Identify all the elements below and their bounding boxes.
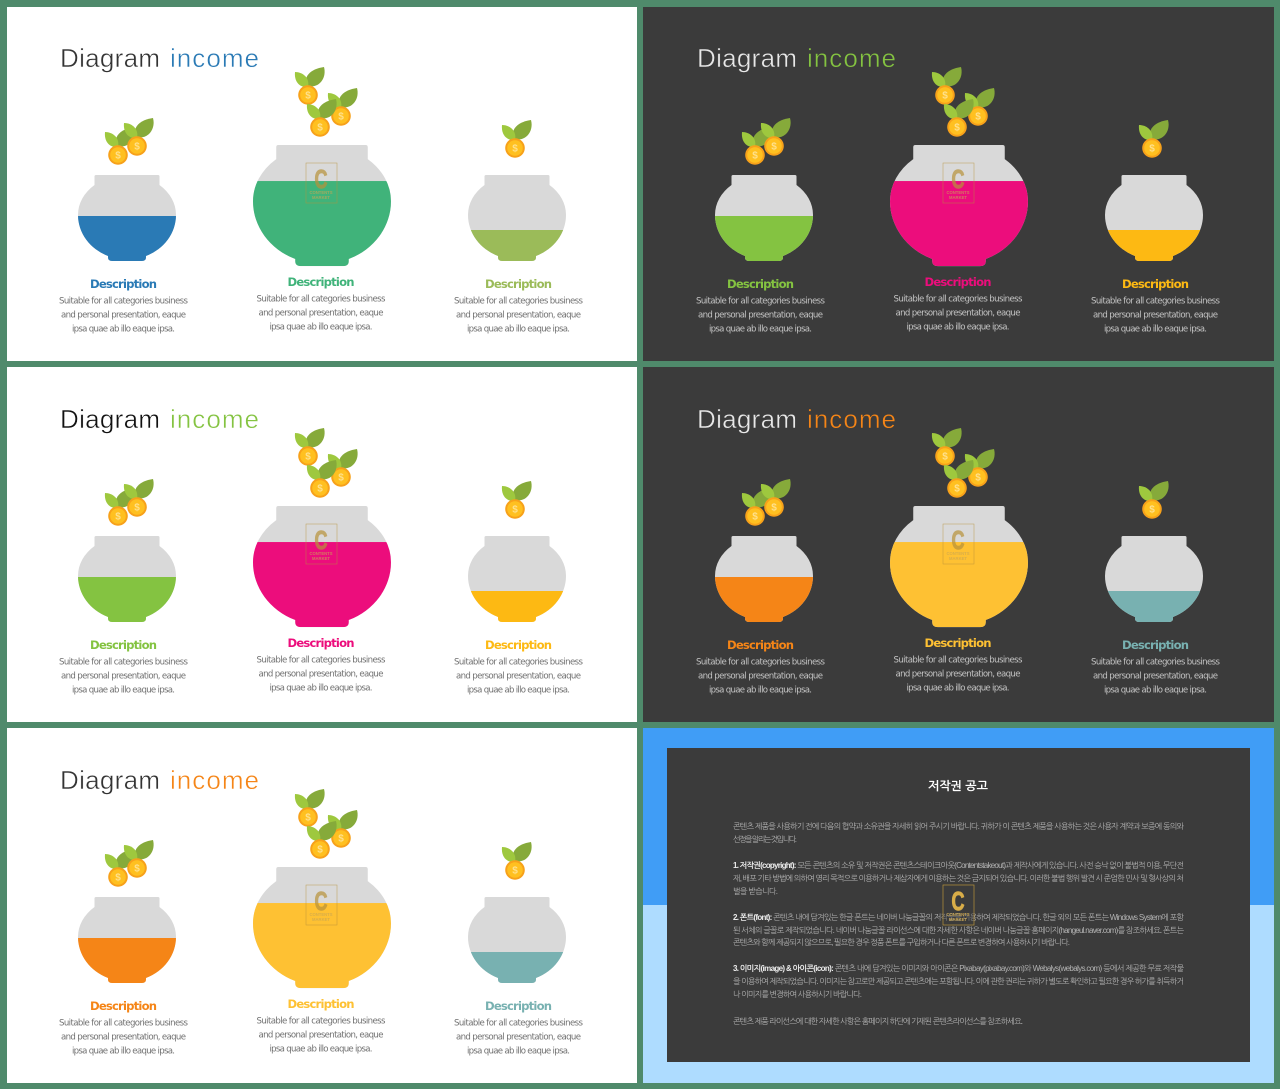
text: left description bbox=[59, 638, 189, 696]
text: left description: Suitable for all categories business bbox=[696, 658, 826, 668]
clause 1: 1. 저작권(copyright): 모든 콘텐츠의 소유 및 저작권은 콘텐츠스테이크아웃(Contentstakeout)과 제작사에게 있습니다. 사전 승낙 없이 불법적 이용, 무단전 bbox=[733, 861, 1184, 870]
text: centre description bbox=[894, 275, 1023, 332]
pot left bbox=[78, 175, 176, 261]
text: right description bbox=[454, 277, 584, 334]
icon: coins centre: $ bbox=[975, 112, 981, 122]
notice heading: 저작권 공고 bbox=[928, 779, 989, 793]
pot centre bbox=[253, 867, 391, 988]
pot left bbox=[78, 897, 176, 983]
watermark logo bbox=[306, 524, 337, 564]
text: left description: ipsa quae ab illo eaque ipsa. bbox=[72, 324, 175, 334]
title: income bbox=[170, 43, 259, 73]
text: right description: and personal presentation, eaque bbox=[456, 1032, 581, 1042]
closing line: 콘텐츠 제품 라이선스에 대한 자세한 사항은 홈페이지 하단에 기재된 콘텐츠라이선스를 참조하세요. bbox=[733, 1017, 1023, 1026]
pot right bbox=[468, 536, 566, 622]
icon: coins centre bbox=[932, 67, 995, 137]
clause 3: 3. 이미지(image) & 아이콘(icon): 콘텐츠 내에 담겨있는 이미지와 아이콘은 Pixabay(pixabay.com)와 Webalys(webalys.com) 등에서 제공한 무료 저작물 bbox=[733, 964, 1184, 973]
watermark logo: MARKET bbox=[949, 556, 967, 561]
pot right bbox=[1105, 536, 1203, 622]
watermark logo: CONTENTS bbox=[309, 912, 333, 917]
text: right description: Description bbox=[485, 277, 552, 291]
text: left description: Description bbox=[90, 277, 157, 291]
panel: green white slide bbox=[7, 367, 637, 722]
text: right description: ipsa quae ab illo eaque ipsa. bbox=[467, 686, 570, 696]
icon: coins left: $ bbox=[115, 512, 121, 522]
title: Diagram bbox=[60, 765, 160, 795]
icon: coins left: $ bbox=[115, 872, 121, 884]
text: right description: ipsa quae ab illo eaque ipsa. bbox=[467, 1046, 570, 1056]
text: left description: ipsa quae ab illo eaque ipsa. bbox=[72, 1046, 175, 1056]
icon: coins centre: $ bbox=[305, 812, 311, 824]
title: income bbox=[170, 765, 259, 795]
text: centre description bbox=[256, 275, 386, 332]
icon: coins left: $ bbox=[134, 864, 140, 874]
text: centre description: Description bbox=[288, 636, 354, 650]
icon: coins left bbox=[105, 840, 154, 887]
icon: coin right bbox=[502, 842, 532, 880]
watermark logo: CONTENTS bbox=[946, 190, 970, 195]
icon: coins centre: $ bbox=[954, 122, 960, 134]
text: right description bbox=[454, 999, 584, 1056]
panel: copyright notice bbox=[643, 728, 1274, 1083]
text: right description: Description bbox=[485, 999, 552, 1013]
icon: coins centre: $ bbox=[338, 112, 344, 122]
pot centre bbox=[253, 506, 391, 627]
text: centre description: and personal presentation, eaque bbox=[896, 308, 1020, 318]
clause 2: 콘텐츠와 함께 제공되지 않으므로, 필요한 경우 정품 폰트를 구입하거나 다른 폰트로 변경하여 사용하시기 바랍니다. bbox=[733, 938, 1070, 947]
icon: coin right: $ bbox=[512, 144, 518, 154]
icon: coins centre bbox=[932, 428, 995, 498]
text: left description: ipsa quae ab illo eaque ipsa. bbox=[709, 686, 812, 696]
clause 2 bbox=[733, 913, 1184, 947]
text: right description: and personal presentation, eaque bbox=[1093, 310, 1218, 320]
watermark logo bbox=[306, 885, 337, 925]
text: right description: Suitable for all categories business bbox=[454, 658, 584, 668]
watermark logo: C bbox=[314, 525, 328, 555]
intro paragraph bbox=[733, 822, 1184, 844]
text: centre description: and personal presentation, eaque bbox=[258, 1030, 384, 1040]
text: right description: Suitable for all categories business bbox=[1091, 658, 1221, 668]
text: right description: Description bbox=[485, 638, 552, 652]
text: right description: and personal presentation, eaque bbox=[456, 672, 581, 682]
text: left description: Description bbox=[90, 999, 157, 1013]
watermark logo: MARKET bbox=[312, 917, 330, 922]
title: Diagram bbox=[697, 43, 797, 73]
watermark logo: C bbox=[314, 164, 328, 194]
text: centre description: and personal presentation, eaque bbox=[258, 308, 384, 318]
clause 2: 2. 폰트(font): 콘텐츠 내에 담겨있는 한글 폰트는 네이버 나눔글꼴의 저작물을 이용하여 제작되었습니다. 한글 외의 모든 폰트는 Windows System에 포함 bbox=[733, 913, 1184, 922]
icon: coin right: $ bbox=[512, 504, 518, 516]
watermark logo: MARKET bbox=[949, 195, 967, 200]
text: left description: ipsa quae ab illo eaque ipsa. bbox=[72, 686, 175, 696]
watermark logo: CONTENTS bbox=[946, 551, 970, 556]
pot left bbox=[78, 536, 176, 622]
pot centre bbox=[890, 145, 1028, 266]
icon: coins left bbox=[742, 479, 791, 526]
text: left description: ipsa quae ab illo eaque ipsa. bbox=[709, 324, 812, 334]
watermark logo: MARKET bbox=[949, 917, 967, 922]
panel: green dark slide bbox=[643, 7, 1274, 361]
clause 3: 을 이용하여 제작되었습니다. 이미지는 참고로만 제공되고 콘텐츠에는 포함됩니다. 이에 관한 권리는 귀하가 별도로 확인하고 필요한 경우 허가를 취득하거 bbox=[733, 977, 1184, 986]
clause 1 bbox=[733, 861, 1184, 896]
pot right bbox=[468, 897, 566, 983]
icon: coin right bbox=[1139, 481, 1169, 519]
text: right description: Description bbox=[1122, 638, 1189, 652]
text: centre description: Suitable for all categories business bbox=[256, 656, 386, 666]
watermark logo: MARKET bbox=[312, 195, 330, 200]
text: centre description: and personal presentation, eaque bbox=[258, 670, 384, 680]
icon: coins centre: $ bbox=[317, 844, 323, 856]
text: left description: Suitable for all categories business bbox=[59, 658, 189, 668]
text: centre description bbox=[894, 636, 1023, 694]
text: left description: and personal presentation, eaque bbox=[61, 1032, 186, 1042]
text: left description bbox=[59, 277, 189, 334]
icon: coins centre bbox=[295, 67, 358, 137]
icon: coin right bbox=[502, 120, 532, 158]
clause 2: 된 서체의 글꼴로 제작되었습니다. 네이버 나눔글꼴 라이선스에 대한 자세한 사항은 네이버 나눔글꼴 홈페이지(hangeul.naver.com)를 참조하세요. 폰트는 bbox=[733, 926, 1184, 935]
icon: coin right: $ bbox=[512, 866, 518, 876]
title: income bbox=[807, 404, 896, 434]
watermark logo bbox=[943, 163, 974, 203]
text: right description bbox=[454, 638, 584, 696]
text: centre description: ipsa quae ab illo eaque ipsa. bbox=[906, 322, 1010, 332]
clause 1: 재, 배포 기타 방법에 의하여 영리 목적으로 이용하거나 제삼자에게 이용하는 것은 금지되어 있습니다. 이러한 불법 행위 발견 시 준엄한 민사 및 형사상의 처 bbox=[733, 874, 1184, 883]
icon: coins centre: $ bbox=[338, 834, 344, 844]
clause 3 bbox=[733, 964, 1184, 999]
pot right bbox=[468, 175, 566, 261]
intro paragraph: 콘텐츠 제품을 사용하기 전에 다음의 협약과 소유권을 자세히 읽어 주시기 바랍니다. 귀하가 이 콘텐츠 제품을 사용하는 것은 사용자 계약과 보증에 동의와 bbox=[733, 822, 1184, 831]
text: left description: Description bbox=[727, 277, 794, 291]
text: centre description: ipsa quae ab illo eaque ipsa. bbox=[270, 684, 372, 694]
icon: coins left bbox=[742, 118, 791, 165]
text: left description: and personal presentation, eaque bbox=[698, 310, 823, 320]
text: centre description: Description bbox=[924, 636, 992, 650]
text: centre description: Description bbox=[288, 275, 354, 289]
pot right bbox=[1105, 175, 1203, 261]
icon: coins centre: $ bbox=[954, 484, 960, 494]
text: left description: and personal presentation, eaque bbox=[698, 672, 823, 682]
clause 3: 나 이미지를 변경하여 사용하시기 바랍니다. bbox=[733, 990, 862, 999]
icon: coins left: $ bbox=[752, 512, 758, 522]
text: left description bbox=[696, 638, 826, 696]
text: right description: ipsa quae ab illo eaque ipsa. bbox=[467, 324, 570, 334]
text: centre description: Suitable for all categories business bbox=[256, 1016, 386, 1026]
title: Diagram bbox=[60, 404, 160, 434]
title: income bbox=[170, 404, 259, 434]
watermark logo: C bbox=[314, 886, 328, 916]
icon: coins left: $ bbox=[771, 142, 777, 152]
text: centre description: and personal presentation, eaque bbox=[896, 670, 1020, 680]
text: right description: and personal presentation, eaque bbox=[456, 310, 581, 320]
text: left description: and personal presentation, eaque bbox=[61, 672, 186, 682]
icon: coin right: $ bbox=[1149, 504, 1155, 516]
icon: coins centre: $ bbox=[317, 122, 323, 134]
text: left description: Suitable for all categories business bbox=[59, 1018, 189, 1028]
icon: coins centre: $ bbox=[305, 90, 311, 102]
text: centre description: Description bbox=[288, 997, 354, 1011]
text: centre description: ipsa quae ab illo eaque ipsa. bbox=[270, 322, 372, 332]
icon: coin right: $ bbox=[1149, 144, 1155, 154]
text: right description bbox=[1091, 638, 1221, 696]
text: centre description: Suitable for all categories business bbox=[256, 294, 386, 304]
watermark logo: C bbox=[952, 525, 965, 555]
text: left description bbox=[696, 277, 826, 334]
watermark logo: CONTENTS bbox=[946, 912, 970, 917]
text: centre description: ipsa quae ab illo eaque ipsa. bbox=[906, 684, 1010, 694]
icon: coins left: $ bbox=[771, 502, 777, 514]
text: left description: Description bbox=[727, 638, 794, 652]
title: income bbox=[807, 43, 896, 73]
pot left bbox=[715, 536, 813, 622]
icon: coins left: $ bbox=[752, 150, 758, 162]
icon: coins left bbox=[105, 118, 154, 165]
text: left description bbox=[59, 999, 189, 1056]
text: centre description: Description bbox=[924, 275, 992, 289]
icon: coins centre bbox=[295, 789, 358, 859]
icon: coins centre: $ bbox=[338, 472, 344, 484]
pot centre bbox=[890, 506, 1028, 627]
watermark logo: C bbox=[952, 886, 965, 916]
text: right description: Suitable for all categories business bbox=[1091, 296, 1221, 306]
text: right description: ipsa quae ab illo eaque ipsa. bbox=[1104, 686, 1207, 696]
text: left description: Suitable for all categories business bbox=[59, 296, 189, 306]
icon: coins centre: $ bbox=[317, 484, 323, 494]
watermark logo bbox=[943, 885, 974, 925]
icon: coins left bbox=[105, 479, 154, 526]
panel: orange white slide bbox=[7, 728, 637, 1083]
icon: coins centre: $ bbox=[975, 472, 981, 484]
text: centre description: ipsa quae ab illo eaque ipsa. bbox=[270, 1044, 372, 1054]
text: right description: Suitable for all categories business bbox=[454, 1018, 584, 1028]
title: Diagram bbox=[697, 404, 797, 434]
clause 1: 벌을 받습니다. bbox=[733, 887, 778, 896]
icon: coins left: $ bbox=[134, 502, 140, 514]
watermark logo: CONTENTS bbox=[309, 190, 333, 195]
intro paragraph: 선정을 알리는 것입니다. bbox=[733, 835, 797, 844]
text: left description: and personal presentation, eaque bbox=[61, 310, 186, 320]
icon: coins left: $ bbox=[115, 150, 121, 162]
text: right description: and personal presentation, eaque bbox=[1093, 672, 1218, 682]
icon: coins centre bbox=[295, 428, 358, 498]
watermark logo: C bbox=[952, 164, 965, 194]
text: right description: Suitable for all categories business bbox=[454, 296, 584, 306]
icon: coins centre: $ bbox=[942, 452, 948, 462]
watermark logo bbox=[943, 524, 974, 564]
pot centre bbox=[253, 145, 391, 266]
watermark logo: CONTENTS bbox=[309, 551, 333, 556]
icon: coins centre: $ bbox=[305, 452, 311, 462]
text: centre description bbox=[256, 997, 386, 1054]
text: right description bbox=[1091, 277, 1221, 334]
pot left bbox=[715, 175, 813, 261]
text: left description: Description bbox=[90, 638, 157, 652]
text: centre description bbox=[256, 636, 386, 694]
text: right description: ipsa quae ab illo eaque ipsa. bbox=[1104, 324, 1207, 334]
text: centre description: Suitable for all categories business bbox=[894, 294, 1023, 304]
icon: coin right bbox=[502, 481, 532, 519]
watermark logo: MARKET bbox=[312, 556, 330, 561]
text: centre description: Suitable for all categories business bbox=[894, 656, 1023, 666]
text: left description: Suitable for all categories business bbox=[696, 296, 826, 306]
icon: coin right bbox=[1139, 120, 1169, 158]
title: Diagram bbox=[60, 43, 160, 73]
icon: coins left: $ bbox=[134, 142, 140, 152]
watermark logo bbox=[306, 163, 337, 203]
icon: coins centre: $ bbox=[942, 90, 948, 102]
panel: orange dark slide bbox=[643, 367, 1274, 722]
text: right description: Description bbox=[1122, 277, 1189, 291]
panel: blue white slide bbox=[7, 7, 637, 361]
